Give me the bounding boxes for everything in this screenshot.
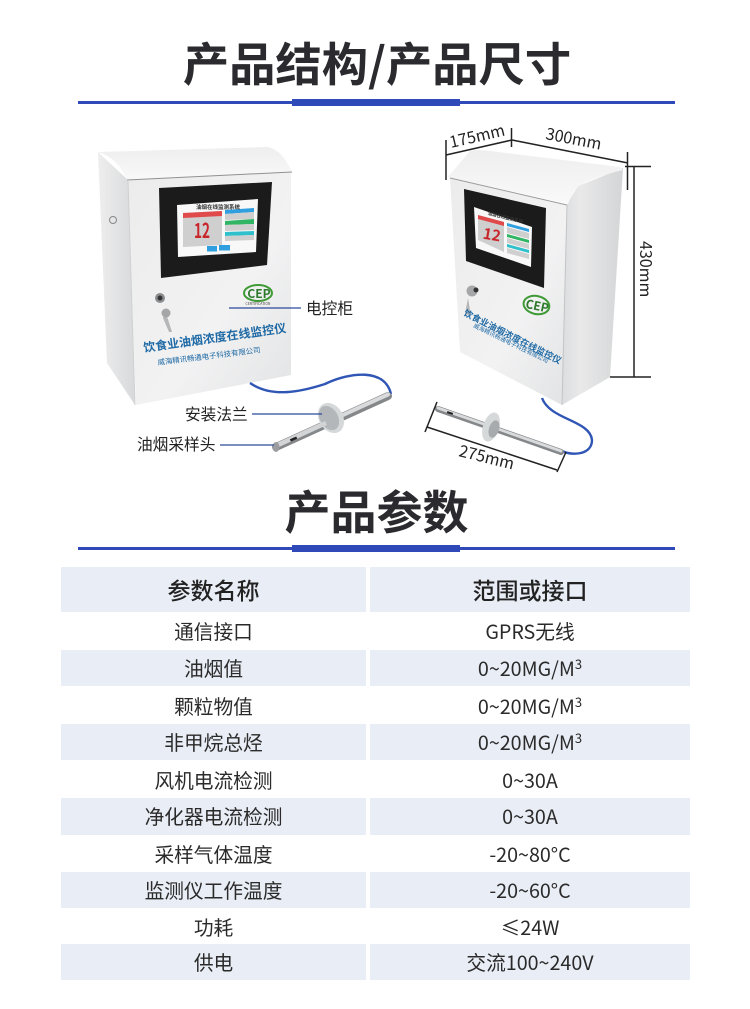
left CEP certification logo: [244, 285, 272, 307]
title: product structure and dimensions: 产品结构/产品尺寸: [183, 28, 571, 95]
left CEP certification logo: CEP: [247, 285, 271, 302]
row value: non-methane hydrocarbons: [370, 724, 690, 760]
row: purifier current: [61, 798, 366, 835]
dimension: 275mm: 275mm: [457, 438, 517, 474]
row value: purifier current: [370, 798, 690, 835]
row: power supply: [61, 944, 366, 980]
dimension: 175mm: 175mm: [447, 117, 507, 153]
dimension: 430mm: 430mm: [635, 241, 659, 297]
left cabinet screen: 12: [194, 215, 210, 244]
left cabinet product name: 饮食业油烟浓度在线监控仪: [142, 319, 287, 356]
left sampling probe with flange: [272, 394, 388, 452]
right cabinet product name: 饮食业油烟浓度在线监控仪: [462, 306, 564, 367]
parameter table: [61, 567, 690, 980]
header cell: parameter name: 参数名称: [168, 572, 260, 606]
row value: non-methane hydrocarbons: 0~20MG/M3: [478, 727, 582, 756]
row value: oil fume: [370, 650, 690, 686]
row: power consumption: 功耗: [194, 912, 233, 941]
left cabinet screen: [159, 182, 272, 278]
right cabinet screen: 油烟在线监测系统: [487, 210, 524, 225]
row: monitor working temperature: 监测仪工作温度: [145, 875, 282, 904]
row value: power supply: [370, 944, 690, 980]
label: control cabinet: [229, 296, 353, 319]
product illustration area: [98, 117, 659, 474]
dimension: 300mm: 300mm: [544, 120, 604, 155]
header cell: range or interface: 范围或接口: [472, 572, 588, 606]
right sampling probe: [438, 408, 561, 452]
title underline: [78, 101, 675, 104]
row: purifier current: 净化器电流检测: [145, 801, 282, 830]
row value: communication: GPRS无线: [485, 616, 575, 645]
row value: oil fume: 0~20MG/M3: [478, 653, 582, 682]
row: power supply: 供电: [194, 947, 233, 976]
left cable: [250, 375, 391, 394]
right CEP logo: CEP: [524, 295, 550, 316]
right cable: [542, 398, 592, 454]
row: communication: 通信接口: [174, 616, 253, 645]
row: non-methane hydrocarbons: [61, 724, 366, 760]
label: sampling head: [137, 432, 274, 455]
label: control cabinet: 电控柜: [306, 296, 353, 319]
dimension: 300mm: [512, 120, 628, 190]
row: non-methane hydrocarbons: 非甲烷总烃: [164, 727, 263, 756]
right cabinet: [448, 150, 623, 405]
row: sampling gas temperature: 采样气体温度: [154, 839, 273, 868]
row: oil fume: [61, 650, 366, 686]
right cabinet screen: 12: [481, 223, 503, 246]
dimension: 175mm: [446, 117, 512, 180]
row value: power consumption: ≤24W: [501, 912, 559, 941]
label: mounting flange: 安装法兰: [185, 402, 248, 425]
left CEP certification logo: CERTIFICATION: [246, 302, 271, 307]
label: sampling head: 油烟采样头: [137, 432, 215, 455]
left cabinet company name: 威海精讯畅通电子科技有限公司: [157, 344, 261, 368]
left cabinet lock and key: [155, 293, 172, 332]
left electric control cabinet: [98, 147, 292, 405]
row value: monitor working temperature: [370, 872, 690, 908]
dimension: 275mm: [425, 402, 566, 474]
row value: power supply: 交流100~240V: [466, 947, 594, 976]
header cell: parameter name: [61, 567, 366, 612]
dimension: 430mm: [610, 166, 659, 377]
row: monitor working temperature: [61, 872, 366, 908]
right cabinet company name: 威海精讯畅通电子科技有限公司: [472, 321, 550, 365]
right cabinet lock: [465, 286, 478, 316]
row: fan current: 风机电流检测: [154, 765, 273, 794]
row: oil fume: 油烟值: [184, 653, 243, 682]
row value: fan current: 0~30A: [502, 765, 558, 794]
row value: particulates: 0~20MG/M3: [478, 691, 582, 720]
heading underline: [78, 547, 675, 550]
label: mounting flange: [185, 402, 322, 425]
right cabinet screen: [464, 189, 546, 288]
row value: sampling gas temperature: -20~80°C: [489, 839, 571, 868]
row value: purifier current: 0~30A: [502, 801, 558, 830]
left cabinet screen: 油烟在线监测系统: [196, 203, 240, 211]
header cell: range or interface: [370, 567, 690, 612]
heading: product parameters: 产品参数: [284, 477, 468, 543]
row: particulates: 颗粒物值: [174, 691, 253, 720]
row value: monitor working temperature: -20~60°C: [489, 875, 571, 904]
